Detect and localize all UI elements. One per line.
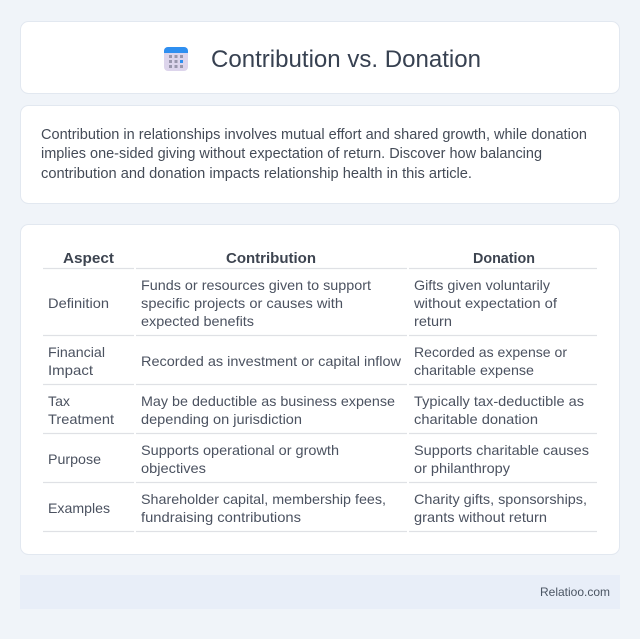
- panel: introduction: [20, 106, 620, 204]
- panel: header: [20, 22, 620, 94]
- row: definition: Funds or resources given to support: [141, 277, 371, 293]
- panel: comparison table: [20, 224, 620, 554]
- row: examples: Shareholder capital, membership fees,: [141, 491, 386, 507]
- row: purpose: objectives: [141, 460, 206, 476]
- text block: introduction: Contribution in relationships involves mutual effort and shared growth, while donation: [41, 127, 587, 143]
- row: purpose: Purpose: [48, 451, 101, 467]
- row: definition: Gifts given voluntarily: [414, 277, 550, 293]
- row: examples: Examples: [48, 500, 110, 516]
- footer credit: Relatioo.com: [540, 585, 610, 599]
- text block: introduction: implies one-sided giving without expectation of return. Discover how balancing: [41, 146, 542, 162]
- row: tax treatment: Typically tax-deductible as: [414, 393, 584, 409]
- row: examples: grants without return: [414, 509, 547, 525]
- row: tax treatment: [48, 393, 584, 427]
- row: financial impact: charitable expense: [414, 362, 534, 378]
- row: financial impact: Recorded as expense or: [414, 344, 567, 360]
- text block: introduction: [41, 127, 587, 182]
- row: financial impact: Impact: [48, 362, 93, 378]
- title: Contribution vs. Donation: [211, 46, 481, 73]
- icon: calendar: [164, 47, 188, 71]
- text block: introduction: contribution and donation impacts relationship health in this article.: [41, 166, 472, 182]
- row: definition: Definition: [48, 295, 109, 311]
- row: purpose: Supports operational or growth: [141, 442, 339, 458]
- row: tax treatment: Treatment: [48, 411, 114, 427]
- row: financial impact: Financial: [48, 344, 105, 360]
- row: definition: without expectation of: [413, 295, 557, 311]
- row: definition: [48, 277, 557, 329]
- row: tax treatment: Tax: [48, 393, 70, 409]
- row: examples: Charity gifts, sponsorships,: [414, 491, 587, 507]
- row: financial impact: [48, 344, 567, 378]
- table header: Donation: [473, 251, 535, 267]
- table rules: [43, 268, 597, 532]
- table header: Contribution: [226, 251, 316, 267]
- row: financial impact: Recorded as investment or capital inflow: [141, 353, 402, 369]
- row: definition: return: [414, 313, 452, 329]
- table header: [63, 251, 535, 267]
- row: definition: specific projects or causes with: [141, 295, 343, 311]
- row: definition: expected benefits: [141, 313, 254, 329]
- row: tax treatment: May be deductible as business expense: [141, 393, 395, 409]
- row: purpose: [48, 442, 589, 476]
- table header: Aspect: [63, 251, 114, 267]
- row: examples: [48, 491, 587, 525]
- footer: [20, 575, 620, 609]
- row: tax treatment: depending on jurisdiction: [141, 411, 302, 427]
- row: purpose: or philanthropy: [414, 460, 510, 476]
- row: tax treatment: charitable donation: [414, 411, 538, 427]
- row: purpose: Supports charitable causes: [414, 442, 589, 458]
- row: examples: fundraising contributions: [141, 509, 301, 525]
